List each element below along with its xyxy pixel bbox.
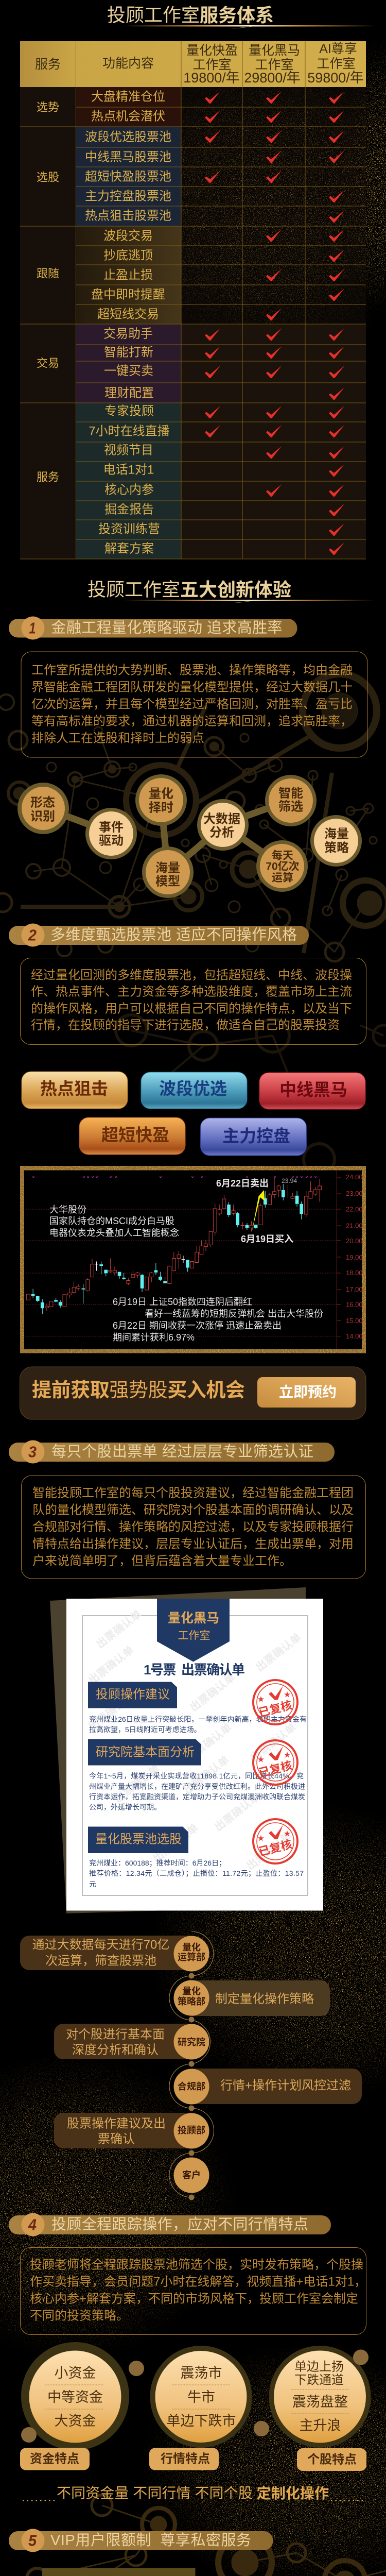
chart markers: × [291, 1175, 294, 1180]
table header: 工作室 [255, 58, 294, 72]
chart annotations: 大华股份 [49, 1205, 86, 1215]
stamp 1 [253, 1680, 297, 1724]
text box 1: 亿次的运算，并且每个模型经过严格回测，对胜率、盈亏比 [31, 698, 353, 711]
row: 理财配置 [76, 383, 344, 403]
chart markers: × [91, 1175, 94, 1180]
research text: 公司，外延增长可期。 [89, 1803, 161, 1811]
step: 投顾部: 票确认 [98, 2132, 135, 2146]
row: 7小时在线直播: 7小时在线直播 [89, 425, 170, 438]
category: 选股 [20, 127, 76, 226]
watermarks: 出票确认单 [249, 1721, 299, 1764]
row: 止盈止损: 止盈止损 [103, 268, 153, 282]
feature circle: 个股特点: 震荡盘整 [292, 2394, 348, 2410]
research text: 州煤业产量大幅增长，在建矿产充分享受供改红利。此外公司积极进 [89, 1783, 305, 1791]
chart axis and grid: 17.00 [346, 1285, 363, 1293]
row: 掘金报告 [76, 501, 344, 520]
step: 研究院: 深度分析和确认 [72, 2043, 159, 2057]
table header: 功能内容 [102, 56, 154, 71]
watermarks [86, 1608, 304, 1872]
text box 4 [21, 2247, 366, 2335]
bubble: 事件驱动: 驱动 [99, 834, 124, 848]
step: 量化运算部 [20, 1936, 209, 1978]
row: 热点狙击股票池: 热点狙击股票池 [85, 209, 171, 223]
row: 超短线交易 [76, 304, 282, 324]
button: 立即预约 [257, 1377, 356, 1408]
chart markers: × [314, 1175, 317, 1180]
step: 量化策略部: 策略部 [178, 1996, 205, 2007]
chart annotations: 期间累计获利6.97% [113, 1332, 195, 1343]
category: 交易 [20, 324, 76, 403]
pill 2 [9, 923, 309, 947]
text box 4: 投顾老师将全程跟踪股票池筛选个股，实时发布策略，个股操 [30, 2258, 363, 2272]
chart axis and grid: 21.00 [346, 1222, 363, 1229]
button: 主力控盘 [201, 1118, 307, 1156]
chart axis and grid: 23.00 [346, 1190, 363, 1197]
row: 交易助手: 交易助手 [103, 327, 153, 341]
bubble: 量化择时 [135, 774, 187, 826]
step: 量化运算部: 运算部 [178, 1952, 205, 1962]
row: 一键买卖 [76, 361, 344, 383]
chart axis and grid: 19.00 [346, 1253, 363, 1261]
pill 5 [9, 2529, 273, 2552]
chart annotations: 电器仪表龙头叠加人工智能概念 [49, 1227, 179, 1238]
tag: 研究院基本面分析 [88, 1739, 201, 1765]
step: 投顾部 [54, 2113, 209, 2156]
chart axis and grid: 24.00 [346, 1173, 363, 1181]
row: 抄底逃顶: 抄底逃顶 [103, 248, 153, 263]
chart axis and grid: 18.00 [346, 1269, 363, 1277]
watermarks: 出票确认单 [86, 1690, 136, 1733]
bubble diagram [17, 774, 362, 898]
bubble: 海量策略: 策略 [324, 841, 349, 855]
stamp 2: 已复核 [257, 1759, 293, 1780]
row: 主力控盘股票池 [76, 187, 344, 206]
feature circle: 资金特点: 资金特点 [30, 2451, 79, 2466]
bubble: 形态识别 [17, 783, 69, 834]
bubble: 事件驱动 [85, 808, 137, 859]
row: 掘金报告: 掘金报告 [104, 503, 154, 516]
step: 研究院: 对个股进行基本面 [66, 2028, 165, 2041]
table header: AI尊享 [319, 42, 357, 56]
step: 量化运算部: 通过大数据每天进行70亿 [32, 1938, 169, 1952]
chart annotations [49, 1177, 323, 1343]
ticket badge [157, 1599, 230, 1662]
step: 合规部: 行情+操作计划风控过滤 [220, 2078, 351, 2093]
table header: 服务 [35, 57, 61, 72]
stamp 1: ★ [257, 1695, 265, 1703]
bubble: 大数据分析: 大数据 [203, 812, 240, 826]
row: 解套方案 [76, 539, 344, 559]
row: 波段交易: 波段交易 [103, 229, 153, 243]
row: 一键买卖: 一键买卖 [104, 364, 153, 378]
bubble: 形态识别: 形态 [30, 795, 55, 810]
heading: 投顾工作室五大创新体验 [87, 579, 376, 603]
tag: 量化股票池选股: 量化股票池选股 [95, 1832, 182, 1846]
chart annotations: 6月22日 期间收获一次涨停 迅速止盈卖出 [113, 1320, 282, 1331]
feature circle: 资金特点: 小资金 [55, 2365, 96, 2381]
pill 1 [9, 616, 297, 640]
process flow [20, 1931, 362, 2200]
feature circle: 行情特点: 牛市 [187, 2389, 215, 2405]
pill 5: 5 [28, 2532, 37, 2549]
text box 3: 户来说简单明了，但背后蕴含着大量专业工作。 [32, 1554, 292, 1568]
button: 主力控盘: 主力控盘 [222, 1126, 290, 1146]
row: 专家投顾 [76, 403, 344, 422]
feature circle: 行情特点 [149, 2346, 269, 2470]
button: 热点狙击 [22, 1072, 128, 1109]
feature circle: 资金特点: 中等资金 [47, 2389, 103, 2405]
text box 1: 排除人工在选股和择时上的弱点 [31, 732, 204, 745]
stamp 3: 已复核 [257, 1838, 293, 1858]
step: 合规部 [174, 2069, 362, 2111]
category: 跟随 [20, 226, 76, 324]
feature circle: 个股特点: 主升浪 [300, 2418, 341, 2433]
step: 合规部: 合规部 [178, 2081, 205, 2092]
feature circle: 个股特点: 个股特点 [307, 2452, 357, 2467]
step: 投顾部: 投顾部 [178, 2125, 205, 2136]
chart markers: × [305, 1175, 308, 1180]
stock pick text: 兖州煤业：600188；推荐时间：6月26日； [89, 1859, 226, 1868]
ticket badge: 量化黑马 [168, 1611, 219, 1625]
button: 超短快盈 [79, 1117, 185, 1155]
text box 1: 界智能金融工程团队研发的量化模型提供，经过大数据几十 [31, 680, 353, 694]
row: 核心内参: 核心内参 [104, 483, 154, 497]
row: 主力控盘股票池: 主力控盘股票池 [85, 190, 171, 203]
pill 2: 2 [28, 926, 37, 944]
category: 交易: 交易 [37, 357, 59, 370]
watermarks: 出票确认单 [213, 1791, 262, 1834]
chart markers [32, 1175, 317, 1180]
row: 视频节目 [76, 442, 344, 462]
advice text: 拉高欲望，5日线附近可考虑进场。 [89, 1725, 201, 1734]
service table [20, 41, 366, 559]
text box 2 [21, 958, 366, 1045]
feature circle: 个股特点: 单边上扬 [294, 2360, 344, 2374]
research text: 今年1~5月，煤炭开采业实现营收11898.1亿元，同比增长44%。兖 [89, 1772, 304, 1780]
button: 波段优选: 波段优选 [159, 1079, 227, 1098]
bubble: 量化择时: 择时 [149, 801, 173, 815]
row: 热点机会潜伏: 热点机会潜伏 [91, 109, 165, 124]
bubble: 事件驱动: 事件 [99, 820, 124, 835]
watermarks: 出票确认单 [254, 1631, 304, 1674]
chart annotations: 看好一线蓝筹的短期反弹机会 出击大华股份 [145, 1309, 323, 1319]
table header: 工作室 [192, 58, 232, 72]
category: 选势 [20, 87, 76, 127]
chart annotations: 23.94 [282, 1177, 297, 1184]
row: 中线黑马股票池: 中线黑马股票池 [85, 150, 171, 164]
chart axis and grid [25, 1171, 363, 1349]
row: 解套方案: 解套方案 [104, 542, 154, 555]
call to action: 提前获取 [20, 1367, 366, 1419]
button: 中线黑马: 中线黑马 [279, 1080, 347, 1099]
row: 波段交易 [76, 226, 344, 246]
button: 波段优选 [141, 1072, 247, 1109]
step: 客户 [174, 2158, 209, 2200]
row: 盘中即时提醒 [76, 285, 344, 304]
row: 智能打新 [76, 345, 344, 361]
stock pick text: 元 [89, 1880, 96, 1888]
row: 盘中即时提醒: 盘中即时提醒 [91, 287, 165, 302]
text box 2: 作、热点事件、主力资金等多种选股维度，覆盖市场上主流 [31, 985, 352, 998]
row: 波段优选股票池: 波段优选股票池 [85, 130, 171, 144]
text box 2: 经过量化回测的多维度股票池，包括超短线、中线、波段操 [31, 969, 352, 982]
tag: 量化股票池选股 [88, 1827, 188, 1853]
row: 波段优选股票池 [76, 127, 344, 147]
call to action: 提前获取: 提前获取强势股买入机会 [32, 1380, 245, 1401]
step: 研究院: 研究院 [178, 2037, 205, 2047]
chart markers: × [273, 1175, 276, 1180]
chart markers: × [159, 1175, 162, 1180]
bubble: 大数据分析 [197, 799, 249, 851]
feature circle: 行情特点: 震荡市 [180, 2365, 222, 2381]
tag: 投顾操作建议 [88, 1682, 177, 1708]
pill 5: VIP用户限额制 尊享私密服务 [50, 2532, 251, 2549]
advice text: 兖州煤业26日放量上行突破长阳，一举创年内新高，表明主力资金有 [89, 1715, 307, 1723]
row: 核心内参 [76, 481, 344, 501]
step: 量化策略部: 量化 [182, 1986, 201, 1996]
button: 超短快盈: 超短快盈 [101, 1125, 169, 1145]
research text: 行资本运作，拓宽融资渠道，定增助力子公司兖煤澳洲收购联合煤炭 [89, 1793, 305, 1801]
candlesticks [27, 1177, 321, 1314]
step: 量化运算部: 次运算，筛查股票池 [45, 1954, 156, 1968]
chart axis and grid: 14.00 [346, 1332, 363, 1340]
bubble: 每天70亿次运算 [256, 840, 308, 892]
tag: 投顾操作建议: 投顾操作建议 [96, 1688, 170, 1701]
chart markers: × [109, 1175, 112, 1180]
watermarks: 出票确认单 [244, 1829, 294, 1872]
row: 热点机会潜伏 [76, 107, 344, 127]
category: 选股: 选股 [37, 171, 59, 183]
pill 1: 金融工程量化策略驱动 追求高胜率 [51, 619, 282, 636]
chart markers: × [295, 1175, 299, 1180]
table header: 19800/年 [183, 70, 240, 86]
chart markers: × [300, 1175, 303, 1180]
chart markers: × [309, 1175, 312, 1180]
table header: 59800/年 [307, 70, 364, 86]
bubble: 海量策略 [310, 815, 362, 867]
feature circle: 行情特点: 行情特点 [161, 2452, 210, 2466]
chart annotations: 6月22日卖出 [216, 1178, 269, 1189]
heading: 投顾工作室五大创新体验: 投顾工作室五大创新体验 [87, 579, 291, 600]
bubble: 量化择时: 量化 [149, 787, 173, 801]
row: 投资训练营 [76, 520, 344, 539]
ticket title: 1号票 出票确认单 [144, 1662, 245, 1677]
row: 中线黑马股票池 [76, 147, 344, 167]
text box 3: 情特点给出操作建议，层层专业认证后，生成出票单，对用 [32, 1537, 354, 1551]
chart annotations: 6月19日买入 [241, 1234, 293, 1244]
category: 服务: 服务 [37, 471, 59, 483]
chart markers: × [191, 1175, 194, 1180]
bubble: 智能筛选: 智能 [278, 786, 303, 801]
table header: 量化黑马 [249, 43, 300, 58]
bubble: 每天70亿次运算: 70亿次 [266, 860, 300, 873]
feature circle: 行情特点: 单边下跌市 [167, 2413, 236, 2429]
stock pick text: 推荐价格：12.34元（二成仓）；止损位：11.72元；止盈位：13.57 [89, 1869, 304, 1878]
chart markers: × [200, 1175, 203, 1180]
row: 止盈止损 [76, 265, 344, 285]
step: 研究院 [54, 2024, 209, 2067]
tag: 研究院基本面分析: 研究院基本面分析 [96, 1745, 195, 1759]
text box 3 [22, 1476, 365, 1579]
category: 跟随: 跟随 [37, 267, 59, 280]
stamp 2 [253, 1740, 297, 1785]
row: 7小时在线直播 [76, 422, 344, 442]
pill 3: 3 [28, 1443, 37, 1461]
row: 理财配置: 理财配置 [104, 386, 154, 400]
text box 3: 智能投顾工作室的每只个股投资建议，经过智能金融工程团 [32, 1486, 354, 1500]
watermarks: 出票确认单 [151, 1822, 201, 1865]
stock chart [20, 1166, 366, 1353]
text box 2: 的操作风格，用户可以根据自己不同的操作特点，以及当下 [31, 1002, 352, 1016]
stamp 1: ★ [284, 1691, 291, 1698]
category: 选势: 选势 [37, 101, 59, 113]
table header: 工作室 [317, 57, 356, 71]
bubble: 智能筛选: 筛选 [278, 800, 303, 814]
stock pick text [89, 1859, 304, 1888]
row: 抄底逃顶 [76, 246, 344, 265]
pill 3: 每只个股出票单 经过层层专业筛选认证 [51, 1443, 313, 1460]
chart markers: × [114, 1175, 117, 1180]
row: 投资训练营: 投资训练营 [98, 522, 160, 536]
pill 4 [9, 2213, 331, 2236]
bubble: 每天70亿次运算: 每天 [272, 850, 293, 861]
table header: 29800/年 [244, 70, 301, 86]
chart axis and grid: 22.00 [346, 1205, 363, 1213]
stamp 3 [253, 1819, 297, 1863]
category: 服务 [20, 403, 76, 559]
tagline: 不同资金量 不同行情 不同个股 定制化操作 [57, 2485, 329, 2501]
heading: 投顾工作室服务体系 [107, 4, 376, 29]
bubble: 形态识别: 识别 [30, 810, 55, 823]
feature circle: 个股特点: 下跌通道 [294, 2373, 344, 2387]
row: 电话1对1: 电话1对1 [103, 463, 154, 477]
chart markers: × [82, 1175, 85, 1180]
row: 超短快盈股票池 [76, 167, 282, 187]
bubble: 每天70亿次运算: 运算 [272, 872, 293, 884]
pill 3 [9, 1440, 335, 1463]
text box 4: 不同的投资策略。 [30, 2309, 129, 2323]
chart annotations: 6月19日 上证50指数四连阴后翻红 [113, 1297, 252, 1307]
feature circle: 个股特点 [269, 2346, 371, 2471]
watermarks: 出票确认单 [86, 1644, 136, 1687]
text box 3: 合规部对行情、操作策略的风控过滤，以及专家投顾根据行 [32, 1520, 354, 1534]
feature circle: 资金特点: 大资金 [55, 2413, 96, 2429]
watermarks: 出票确认单 [188, 1671, 238, 1714]
row: 超短快盈股票池: 超短快盈股票池 [85, 170, 171, 183]
pill 4: 4 [28, 2215, 37, 2234]
text box 4: 核心内参+解套方案，不同的市场风格下，投顾工作室会制定 [30, 2292, 358, 2306]
text box 4: 作买卖指导，会员问题7小时在线解答，视频直播+电话1对1， [30, 2275, 366, 2289]
advice text [89, 1715, 307, 1734]
ticket badge: 工作室 [178, 1630, 210, 1641]
chart markers: × [245, 1175, 249, 1180]
step: 量化运算部: 量化 [182, 1942, 201, 1953]
background network 2 [0, 2495, 386, 2576]
row: 大盘精准仓位 [76, 87, 344, 107]
row: 超短线交易: 超短线交易 [97, 307, 159, 321]
bubble: 大数据分析: 分析 [209, 825, 234, 840]
row: 交易助手 [76, 324, 344, 345]
watermarks: 出票确认单 [94, 1608, 144, 1651]
bubble: 海量模型 [142, 846, 194, 898]
stamp 2: ★ [284, 1751, 291, 1759]
stamp 3: ★ [257, 1834, 265, 1842]
chart markers: × [95, 1175, 98, 1180]
chart axis and grid: 15.00 [346, 1317, 363, 1325]
row: 电话1对1 [76, 462, 344, 481]
row: 专家投顾: 专家投顾 [104, 404, 154, 418]
pill 1: 1 [29, 619, 36, 637]
research text [89, 1772, 305, 1811]
chart axis and grid: 20.00 [346, 1237, 363, 1245]
watermarks: 出票确认单 [112, 1762, 162, 1805]
chart markers: × [32, 1175, 35, 1180]
pill 2: 多维度甄选股票池 适应不同操作风格 [50, 926, 297, 943]
phone screenshot [42, 2568, 196, 2576]
heading: 投顾工作室服务体系: 投顾工作室服务体系 [107, 4, 274, 26]
step: 客户: 客户 [182, 2170, 201, 2180]
table header: 量化快盈 [186, 43, 238, 58]
row: 智能打新: 智能打新 [104, 345, 153, 360]
ticket card [50, 1587, 323, 1913]
button: 立即预约: 立即预约 [279, 1384, 337, 1400]
stamp 1: 已复核 [257, 1699, 293, 1719]
text box 2: 行情，在投顾的指导下进行选股，做适合自己的股票投资 [31, 1018, 340, 1032]
row: 热点狙击股票池 [76, 206, 344, 226]
text box 3: 队的量化模型筛选、研究院对个股基本面的调研确认、以及 [32, 1503, 354, 1517]
chart annotations: 国家队持仓的MSCI成分白马股 [49, 1216, 174, 1226]
table header [20, 41, 366, 87]
bubble: 智能筛选 [265, 775, 317, 826]
text box 1 [21, 652, 367, 757]
chart markers: × [86, 1175, 90, 1180]
stamp 3: ★ [284, 1830, 291, 1837]
watermarks: 出票确认单 [184, 1721, 234, 1764]
step: 量化策略部 [174, 1980, 330, 2023]
text box 1: 等有高标准的要求，通过机器的运算和回测，追求高胜率， [31, 714, 353, 728]
button: 中线黑马 [259, 1073, 365, 1109]
row: 大盘精准仓位: 大盘精准仓位 [91, 90, 165, 104]
step: 量化策略部: 制定量化操作策略 [215, 1992, 314, 2006]
watermarks: 出票确认单 [182, 1754, 232, 1797]
text box 1: 工作室所提供的大势判断、股票池、操作策略等，均由金融 [31, 664, 353, 677]
bubble: 海量模型: 海量 [155, 861, 180, 875]
row: 视频节目: 视频节目 [104, 443, 153, 457]
step: 投顾部: 股票操作建议及出 [67, 2116, 166, 2131]
chart axis and grid: 16.00 [346, 1300, 363, 1309]
bubble: 海量模型: 模型 [155, 875, 180, 888]
bubble: 海量策略: 海量 [324, 827, 349, 841]
feature circle: 资金特点 [20, 2342, 144, 2470]
background network 1 [0, 674, 386, 1175]
stamp 2: ★ [257, 1756, 265, 1763]
button: 热点狙击: 热点狙击 [40, 1079, 108, 1098]
pill 4: 投顾全程跟踪操作，应对不同行情特点 [51, 2216, 308, 2233]
